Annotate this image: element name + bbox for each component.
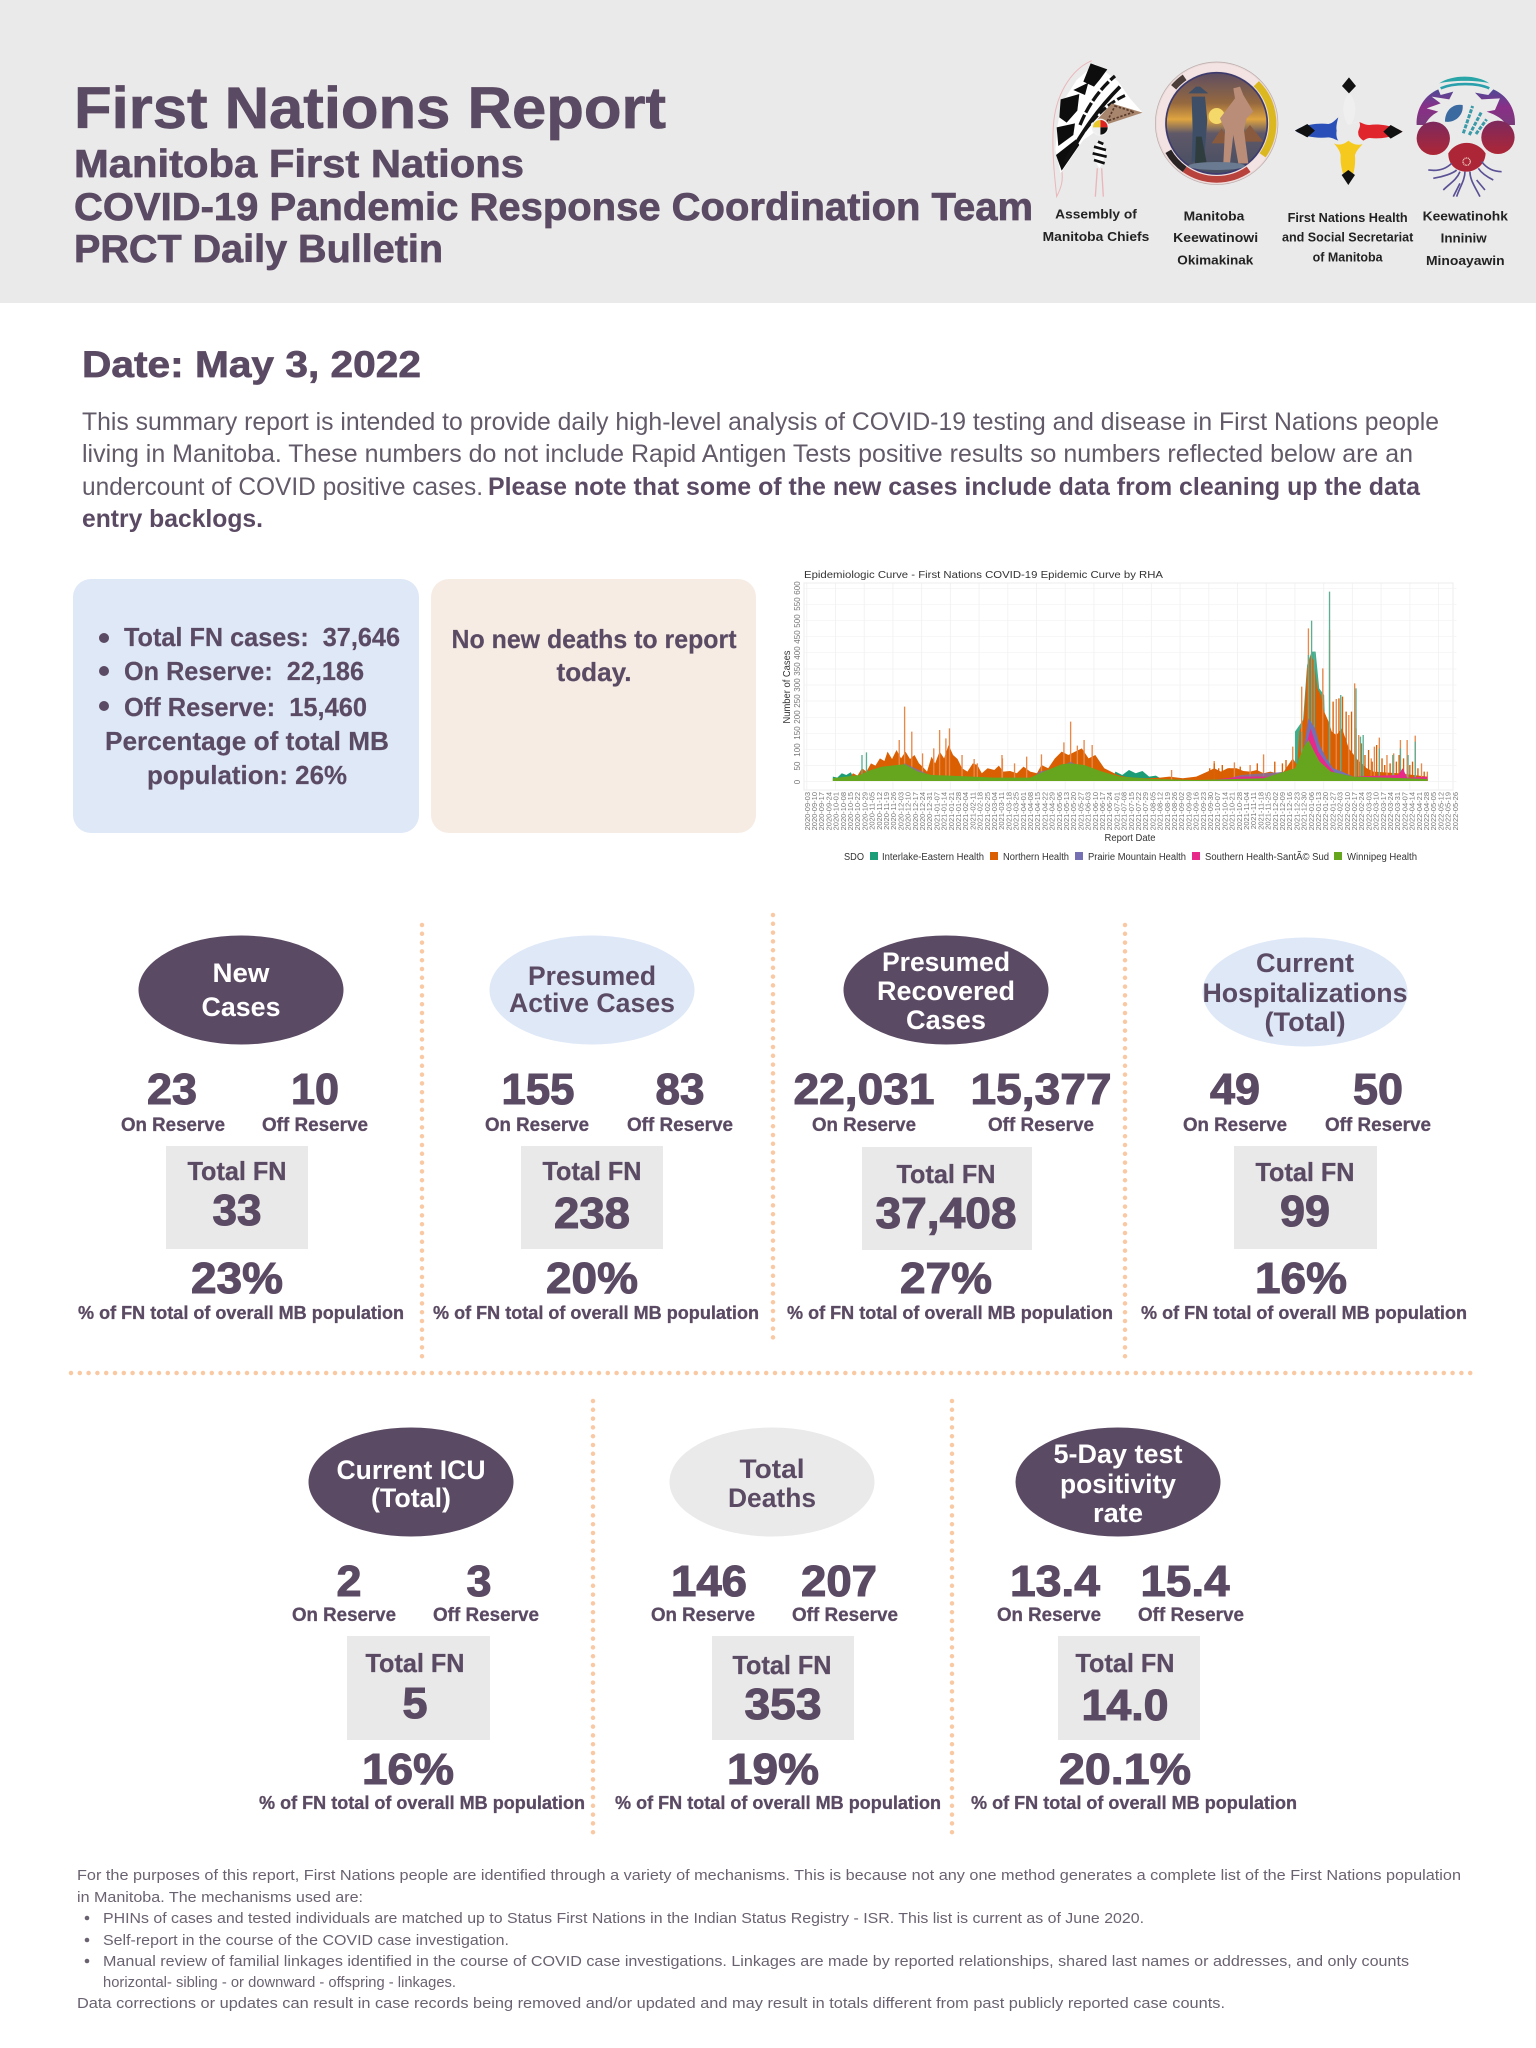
y axis ticks	[793, 581, 802, 784]
icon: four feathers logo, First Nations Health and Social Secretariat	[1295, 77, 1403, 185]
x axis date ticks: 2022-03-24	[1386, 792, 1395, 830]
y axis ticks: 100	[793, 743, 802, 757]
panel: new cases: Off Reserve	[262, 1115, 368, 1136]
intro paragraph: undercount of COVID positive cases.	[82, 473, 483, 501]
panel: current hospitalizations: % of FN total of overall MB population	[1141, 1303, 1467, 1323]
panel: current hospitalizations	[1141, 938, 1467, 1323]
x axis date ticks: 2021-07-01	[1112, 792, 1121, 830]
x axis date ticks: 2021-06-03	[1084, 792, 1093, 830]
x axis date ticks: 2021-01-28	[954, 792, 963, 830]
x axis date ticks: 2021-05-27	[1076, 792, 1085, 830]
x axis date ticks: 2020-10-01	[832, 792, 841, 830]
intro paragraph	[82, 408, 1439, 533]
panel: current ICU: Off Reserve	[433, 1605, 539, 1626]
x axis date ticks: 2021-03-18	[1004, 792, 1013, 830]
badge: presumed recovered cases: Presumed	[882, 947, 1010, 977]
panel: total cases summary	[73, 579, 419, 833]
x axis date ticks: 2021-06-17	[1098, 792, 1107, 830]
chart legend: Interlake-Eastern Health	[882, 852, 984, 863]
panel: current hospitalizations: Off Reserve	[1325, 1115, 1431, 1136]
subtitle	[74, 143, 1033, 271]
panel: new cases: 10	[291, 1065, 339, 1114]
panel: 5-day test positivity rate: On Reserve	[997, 1605, 1101, 1626]
panel: current ICU: 16%	[362, 1745, 454, 1794]
panel: presumed recovered cases: 27%	[900, 1254, 992, 1303]
panel: 5-day test positivity rate: % of FN total of overall MB population	[971, 1793, 1297, 1813]
panel: new cases: 23	[147, 1065, 197, 1114]
chart legend: SDO	[844, 852, 864, 863]
x axis date ticks: 2021-02-18	[976, 792, 985, 830]
x axis date ticks: 2021-05-06	[1055, 792, 1064, 830]
panel: total cases summary: Total FN cases: 37,646	[124, 622, 400, 652]
footnote: horizontal- sibling - or downward - offspring - linkages.	[103, 1974, 456, 1991]
badge: presumed active cases: Presumed	[528, 961, 656, 991]
x axis date ticks: 2022-02-10	[1343, 792, 1352, 830]
chart: epidemic curve by RHA: Report Date	[1104, 833, 1156, 844]
y axis ticks: 200	[793, 710, 802, 724]
panel: 5-day test positivity rate	[971, 1428, 1297, 1813]
y axis ticks: 600	[793, 581, 802, 595]
chart: epidemic curve by RHA: Number of Cases	[782, 650, 793, 724]
panel: total deaths: On Reserve	[651, 1605, 755, 1626]
x axis date ticks: 2022-04-21	[1415, 792, 1424, 830]
panel: current ICU	[259, 1428, 585, 1813]
panel: 5-day test positivity rate: 14.0	[1082, 1681, 1168, 1730]
panel: presumed recovered cases: % of FN total of overall MB population	[787, 1303, 1113, 1323]
badge: 5-day test positivity rate: 5-Day test	[1054, 1439, 1183, 1469]
title: First Nations Report	[74, 76, 666, 141]
badge: current hospitalizations: Hospitalizations	[1202, 978, 1408, 1008]
x axis date ticks: 2021-07-29	[1141, 792, 1150, 830]
panel: total deaths: 146	[671, 1557, 747, 1606]
y axis ticks: 550	[793, 597, 802, 611]
logo captions: First Nations Health	[1288, 210, 1408, 225]
badge: presumed recovered cases	[844, 936, 1048, 1044]
panel: presumed active cases: Total FN	[542, 1156, 642, 1186]
intro paragraph: living in Manitoba. These numbers do not include Rapid Antigen Tests positive results so numbers reflected below are an	[82, 440, 1413, 468]
x axis date ticks: 2020-10-29	[860, 792, 869, 830]
chart: epidemic curve by RHA	[782, 570, 1460, 863]
logo captions: and Social Secretariat	[1282, 230, 1414, 245]
logo captions: Manitoba Chiefs	[1043, 229, 1149, 244]
panel: deaths notice: No new deaths to report	[452, 624, 737, 654]
y axis ticks: 50	[793, 761, 802, 770]
x axis date ticks: 2020-12-31	[925, 792, 934, 830]
x axis date ticks: 2021-08-19	[1163, 792, 1172, 830]
x axis date ticks: 2022-04-14	[1408, 792, 1417, 830]
panel: current hospitalizations: On Reserve	[1183, 1115, 1287, 1136]
panel: presumed active cases: 20%	[546, 1254, 638, 1303]
x axis date ticks: 2021-08-12	[1156, 792, 1165, 830]
panel: presumed recovered cases: Total FN	[896, 1159, 996, 1189]
x axis date ticks: 2022-05-05	[1429, 792, 1438, 830]
date heading: Date: May 3, 2022	[82, 344, 421, 385]
y axis ticks: 500	[793, 614, 802, 628]
panel: new cases: % of FN total of overall MB population	[78, 1303, 404, 1323]
panel: deaths notice	[431, 579, 756, 833]
badge: total deaths	[670, 1428, 874, 1536]
logo captions: Minoayawin	[1426, 253, 1505, 268]
logo captions	[1043, 206, 1509, 268]
badge: presumed active cases	[490, 936, 694, 1044]
y axis ticks: 450	[793, 630, 802, 644]
panel: current ICU: 3	[466, 1557, 492, 1606]
panel: 5-day test positivity rate: Off Reserve	[1138, 1605, 1244, 1626]
panel: total cases summary: Percentage of total MB	[105, 726, 389, 756]
chart legend: Southern Health-SantÃ© Sud	[1205, 850, 1329, 863]
x axis date ticks: 2022-02-03	[1336, 792, 1345, 830]
x axis date ticks: 2021-11-25	[1264, 792, 1273, 830]
x axis date ticks: 2021-06-10	[1091, 792, 1100, 830]
x axis date ticks: 2022-01-13	[1314, 792, 1323, 830]
x axis date ticks: 2021-02-11	[968, 792, 977, 830]
x axis date ticks: 2021-04-29	[1048, 792, 1057, 830]
x axis date ticks: 2021-09-30	[1206, 792, 1215, 830]
x axis date ticks: 2021-10-07	[1213, 792, 1222, 830]
x axis date ticks: 2022-04-28	[1422, 792, 1431, 830]
footnote: For the purposes of this report, First Nations people are identified through a variety of mechanisms. This is because not any one method generates a complete list of the First Nations population	[77, 1867, 1461, 1884]
panel: presumed active cases: 155	[502, 1065, 574, 1114]
panel: current ICU: Total FN	[366, 1648, 464, 1678]
panel: presumed recovered cases: Off Reserve	[988, 1115, 1094, 1136]
x axis date ticks: 2021-05-13	[1062, 792, 1071, 830]
x axis date ticks: 2020-10-22	[853, 792, 862, 830]
x axis date ticks: 2021-10-14	[1220, 792, 1229, 830]
chart legend	[844, 850, 1417, 863]
x axis date ticks: 2021-10-28	[1235, 792, 1244, 830]
logo captions: of Manitoba	[1313, 250, 1383, 265]
badge: new cases: New	[212, 958, 271, 988]
x axis date ticks: 2021-09-02	[1177, 792, 1186, 830]
x axis date ticks: 2021-07-08	[1120, 792, 1129, 830]
panel: new cases: On Reserve	[121, 1115, 225, 1136]
panel: total deaths: 353	[744, 1680, 822, 1729]
x axis date ticks: 2020-09-24	[824, 792, 833, 830]
x axis date ticks: 2022-03-31	[1393, 792, 1402, 830]
subtitle: COVID-19 Pandemic Response Coordination Team	[74, 186, 1033, 229]
panel: total deaths: 207	[801, 1557, 877, 1606]
footnote	[77, 1867, 1461, 2012]
x axis date ticks: 2021-12-30	[1300, 792, 1309, 830]
x axis date ticks: 2020-11-12	[875, 792, 884, 830]
panel: new cases: 23%	[191, 1254, 283, 1303]
x axis date ticks: 2020-12-03	[896, 792, 905, 830]
x axis date ticks: 2022-04-07	[1400, 792, 1409, 830]
x axis date ticks: 2020-10-15	[846, 792, 855, 830]
logo captions: Keewatinowi	[1173, 230, 1258, 245]
x axis date ticks: 2020-09-17	[817, 792, 826, 830]
panel: total deaths: % of FN total of overall MB population	[615, 1793, 941, 1813]
x axis date ticks: 2021-12-16	[1285, 792, 1294, 830]
x axis date ticks: 2021-12-02	[1271, 792, 1280, 830]
panel: presumed active cases	[433, 936, 759, 1323]
x axis date ticks: 2022-05-19	[1444, 792, 1453, 830]
footnote: PHINs of cases and tested individuals are matched up to Status First Nations in the Indian Status Registry - ISR. This list is current as of June 2020.	[103, 1910, 1144, 1927]
panel: presumed active cases: 83	[656, 1065, 704, 1114]
x axis date ticks: 2021-05-20	[1069, 792, 1078, 830]
panel: 5-day test positivity rate: Total FN	[1076, 1648, 1174, 1678]
x axis date ticks: 2021-11-04	[1242, 792, 1251, 830]
x axis date ticks: 2021-02-04	[961, 792, 970, 830]
footnote: Data corrections or updates can result in case records being removed and/or updated and may result in totals different from past publicly reported case counts.	[77, 1995, 1225, 2012]
x axis date ticks: 2021-01-21	[947, 792, 956, 830]
subtitle: Manitoba First Nations	[74, 143, 524, 186]
x axis date ticks: 2020-11-19	[882, 792, 891, 830]
x axis date ticks: 2021-09-23	[1199, 792, 1208, 830]
logo captions: Assembly of	[1055, 206, 1137, 221]
x axis date ticks: 2021-04-08	[1026, 792, 1035, 830]
logo captions: Inniniw	[1441, 230, 1487, 245]
x axis date ticks: 2020-09-10	[810, 792, 819, 830]
x axis date ticks: 2020-11-26	[889, 792, 898, 830]
chart legend: Winnipeg Health	[1347, 852, 1417, 863]
panel: current hospitalizations: 99	[1280, 1187, 1330, 1236]
logos	[1043, 61, 1515, 268]
panel: current ICU: 5	[402, 1679, 428, 1728]
badge: presumed active cases: Active Cases	[509, 988, 675, 1018]
logo captions: Keewatinohk	[1423, 208, 1509, 223]
x axis date ticks: 2021-03-11	[997, 792, 1006, 830]
y axis ticks: 400	[793, 646, 802, 660]
badge: new cases	[138, 936, 344, 1044]
x axis date ticks: 2022-01-27	[1328, 792, 1337, 830]
y axis ticks: 150	[793, 726, 802, 740]
panel: total deaths: Total FN	[732, 1650, 832, 1680]
chart legend: Prairie Mountain Health	[1088, 852, 1186, 863]
x axis date ticks: 2022-01-06	[1307, 792, 1316, 830]
x axis date ticks: 2021-07-15	[1127, 792, 1136, 830]
badge: current ICU: Current ICU	[336, 1455, 486, 1485]
x axis date ticks: 2021-04-15	[1033, 792, 1042, 830]
x axis date ticks	[803, 792, 1460, 830]
panel: current hospitalizations: Total FN	[1256, 1157, 1354, 1187]
panel: current ICU: On Reserve	[292, 1605, 396, 1626]
panel: total deaths: Off Reserve	[792, 1605, 898, 1626]
x axis date ticks: 2021-01-07	[932, 792, 941, 830]
x axis date ticks: 2022-05-12	[1436, 792, 1445, 830]
x axis date ticks: 2021-12-23	[1292, 792, 1301, 830]
x axis date ticks: 2020-12-10	[904, 792, 913, 830]
x axis date ticks: 2021-07-22	[1134, 792, 1143, 830]
panel: presumed active cases: Off Reserve	[627, 1115, 733, 1136]
x axis date ticks: 2021-01-14	[940, 792, 949, 830]
logo captions: Manitoba	[1184, 208, 1245, 223]
icon: medallion logo, Manitoba Keewatinowi Okimakinak	[1155, 62, 1278, 185]
panel: presumed recovered cases	[787, 936, 1113, 1323]
x axis date ticks: 2022-01-20	[1321, 792, 1330, 830]
y axis ticks: 0	[793, 779, 802, 784]
panel: presumed recovered cases: 22,031	[794, 1065, 934, 1114]
x axis date ticks: 2021-11-18	[1256, 792, 1265, 830]
x axis date ticks: 2022-02-24	[1357, 792, 1366, 830]
panel: deaths notice: today.	[556, 657, 632, 687]
panel: presumed active cases: 238	[554, 1189, 630, 1238]
icon: Keewatinohk Inniniw Minoayawin logo	[1417, 77, 1515, 197]
intro paragraph: entry backlogs.	[82, 505, 263, 533]
panel: total cases summary: On Reserve: 22,186	[124, 656, 364, 686]
y axis ticks: 350	[793, 662, 802, 676]
footnote: in Manitoba. The mechanisms used are:	[77, 1889, 363, 1906]
x axis date ticks: 2021-03-04	[990, 792, 999, 830]
panel: current hospitalizations: 50	[1353, 1065, 1403, 1114]
footnote: Self-report in the course of the COVID case investigation.	[103, 1932, 509, 1949]
panel: presumed recovered cases: 15,377	[970, 1065, 1112, 1114]
intro paragraph: Please note that some of the new cases include data from cleaning up the data	[488, 473, 1421, 501]
subtitle: PRCT Daily Bulletin	[74, 228, 443, 271]
x axis date ticks: 2020-10-08	[839, 792, 848, 830]
panel: presumed recovered cases: 37,408	[876, 1189, 1016, 1238]
x axis date ticks: 2020-11-05	[868, 792, 877, 830]
x axis date ticks: 2020-12-24	[918, 792, 927, 830]
x axis date ticks: 2021-08-05	[1148, 792, 1157, 830]
x axis date ticks: 2021-08-26	[1170, 792, 1179, 830]
panel: new cases: 33	[212, 1186, 262, 1235]
panel: 5-day test positivity rate: 15.4	[1140, 1557, 1230, 1606]
panel: current ICU: % of FN total of overall MB population	[259, 1793, 585, 1813]
panel: 5-day test positivity rate: 20.1%	[1059, 1745, 1191, 1794]
x axis date ticks: 2021-09-09	[1184, 792, 1193, 830]
badge: current ICU: (Total)	[371, 1483, 451, 1513]
panel: total cases summary: Off Reserve: 15,460	[124, 692, 367, 722]
x axis date ticks: 2021-06-24	[1105, 792, 1114, 830]
x axis date ticks: 2022-03-17	[1379, 792, 1388, 830]
panel: total cases summary: population: 26%	[147, 760, 347, 790]
badge: 5-day test positivity rate	[1016, 1428, 1220, 1536]
badge: 5-day test positivity rate: positivity	[1060, 1469, 1176, 1499]
panel: total deaths: 19%	[727, 1745, 819, 1794]
x axis date ticks: 2021-09-16	[1192, 792, 1201, 830]
x axis date ticks: 2022-05-26	[1451, 792, 1460, 830]
x axis date ticks: 2021-12-09	[1278, 792, 1287, 830]
badge: total deaths: Deaths	[728, 1483, 816, 1513]
panel: new cases	[78, 936, 404, 1323]
icon: headdress logo, Assembly of Manitoba Chiefs	[1053, 61, 1143, 197]
panel: current hospitalizations: 49	[1210, 1065, 1260, 1114]
x axis date ticks: 2022-03-10	[1372, 792, 1381, 830]
panel: new cases: Total FN	[188, 1156, 286, 1186]
badge: new cases: Cases	[202, 992, 280, 1022]
panel: total deaths	[615, 1428, 941, 1813]
header band	[0, 0, 1536, 303]
logo captions: Okimakinak	[1177, 252, 1254, 267]
chart legend: Northern Health	[1003, 852, 1069, 863]
badge: total deaths: Total	[740, 1454, 804, 1484]
y axis ticks: 300	[793, 678, 802, 692]
x axis date ticks: 2021-11-11	[1249, 792, 1258, 829]
badge: current hospitalizations	[1202, 938, 1408, 1046]
panel: current hospitalizations: 16%	[1255, 1254, 1347, 1303]
chart: epidemic curve by RHA: Epidemiologic Curve - First Nations COVID-19 Epidemic Curve by RHA	[804, 570, 1163, 581]
x axis date ticks: 2021-02-25	[983, 792, 992, 830]
badge: 5-day test positivity rate: rate	[1093, 1498, 1143, 1528]
intro paragraph: This summary report is intended to provide daily high-level analysis of COVID-19 testing and disease in First Nations people	[82, 408, 1439, 436]
x axis date ticks: 2020-12-17	[911, 792, 920, 830]
x axis date ticks: 2020-09-03	[803, 792, 812, 830]
x axis date ticks: 2021-04-22	[1040, 792, 1049, 830]
x axis date ticks: 2021-03-25	[1012, 792, 1021, 830]
panel: presumed active cases: % of FN total of overall MB population	[433, 1303, 759, 1323]
y axis ticks: 250	[793, 694, 802, 708]
panel: presumed recovered cases: On Reserve	[812, 1115, 916, 1136]
x axis date ticks: 2021-04-01	[1019, 792, 1028, 830]
badge: presumed recovered cases: Cases	[906, 1005, 986, 1035]
badge: current hospitalizations: Current	[1256, 948, 1354, 978]
x axis date ticks: 2021-10-21	[1228, 792, 1237, 830]
badge: presumed recovered cases: Recovered	[877, 976, 1015, 1006]
x axis date ticks: 2022-02-17	[1350, 792, 1359, 830]
panel: current ICU: 2	[336, 1557, 362, 1606]
footnote: Manual review of familial linkages identified in the course of COVID case investigations. Linkages are made by reported relationships, shared last names or addresses, and only counts	[103, 1953, 1409, 1970]
panel: 5-day test positivity rate: 13.4	[1010, 1557, 1101, 1606]
x axis date ticks: 2022-03-03	[1364, 792, 1373, 830]
badge: current hospitalizations: (Total)	[1264, 1007, 1346, 1037]
badge: current ICU	[308, 1428, 514, 1536]
panel: presumed active cases: On Reserve	[485, 1115, 589, 1136]
